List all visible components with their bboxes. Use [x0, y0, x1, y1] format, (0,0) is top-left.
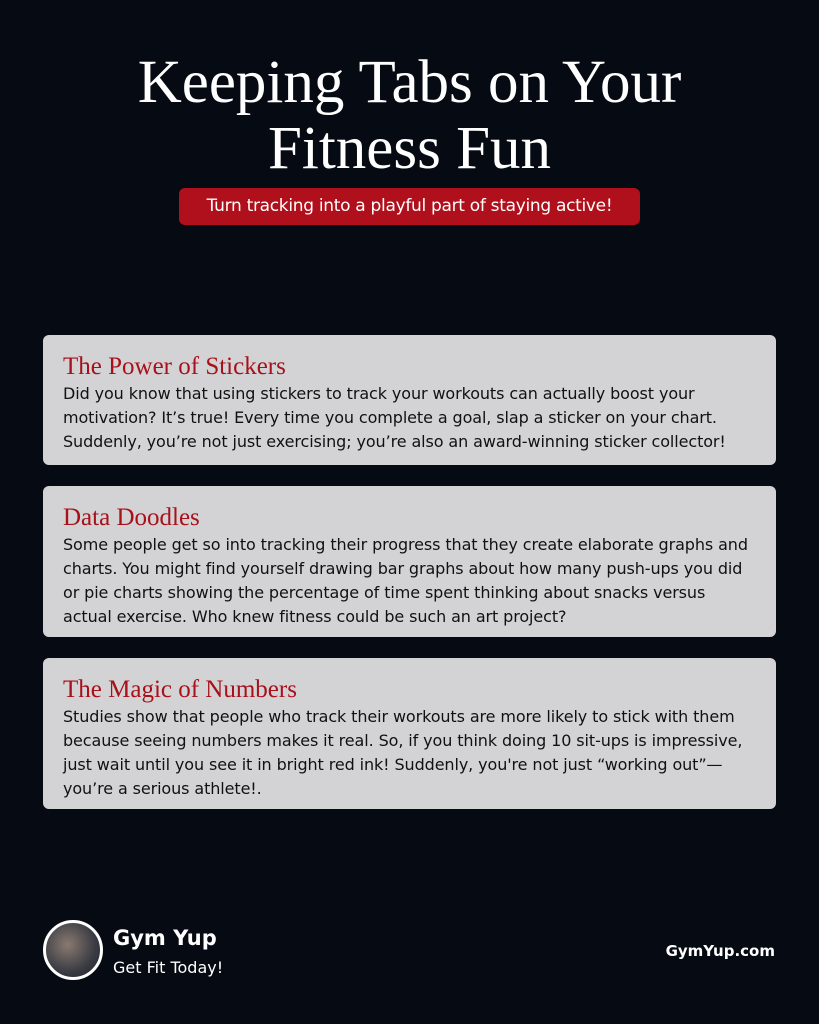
panel: doodles	[43, 486, 776, 637]
title: Keeping Tabs on Your	[138, 49, 681, 116]
title: Fitness Fun	[268, 115, 551, 182]
icon: avatar	[43, 920, 103, 980]
title	[138, 49, 681, 182]
text: stickers: Did you know that using stickers to track your workouts can actually boost your motivation? It’s true! Every time you complete a goal, slap a sticker on your chart. Suddenly, you’re not just exercising; you’re also an award-winning sticker collector!	[63, 384, 726, 451]
panel: numbers	[43, 658, 776, 809]
panel: stickers	[43, 335, 776, 465]
subtitle banner	[179, 188, 640, 225]
heading: doodles: Data Doodles	[63, 504, 200, 531]
heading: stickers: The Power of Stickers	[63, 353, 286, 380]
tagline: Get Fit Today!	[113, 958, 223, 977]
footer brand	[43, 920, 223, 980]
text: numbers: Studies show that people who track their workouts are more likely to stick with them because seeing numbers makes it real. So, if you think doing 10 sit-ups is impressive, just wait until you see it in bright red ink! Suddenly, you're not just “working out”—you’re a serious athlete!.	[63, 707, 742, 798]
heading: numbers: The Magic of Numbers	[63, 676, 297, 703]
website: GymYup.com	[666, 942, 775, 960]
text: doodles: Some people get so into tracking their progress that they create elaborate graphs and charts. You might find yourself drawing bar graphs about how many push-ups you did or pie charts showing the percentage of time spent thinking about snacks versus actual exercise. Who knew fitness could be such an art project?	[63, 535, 748, 626]
subtitle banner: Turn tracking into a playful part of staying active!	[207, 196, 612, 216]
brand name: Gym Yup	[113, 926, 217, 950]
